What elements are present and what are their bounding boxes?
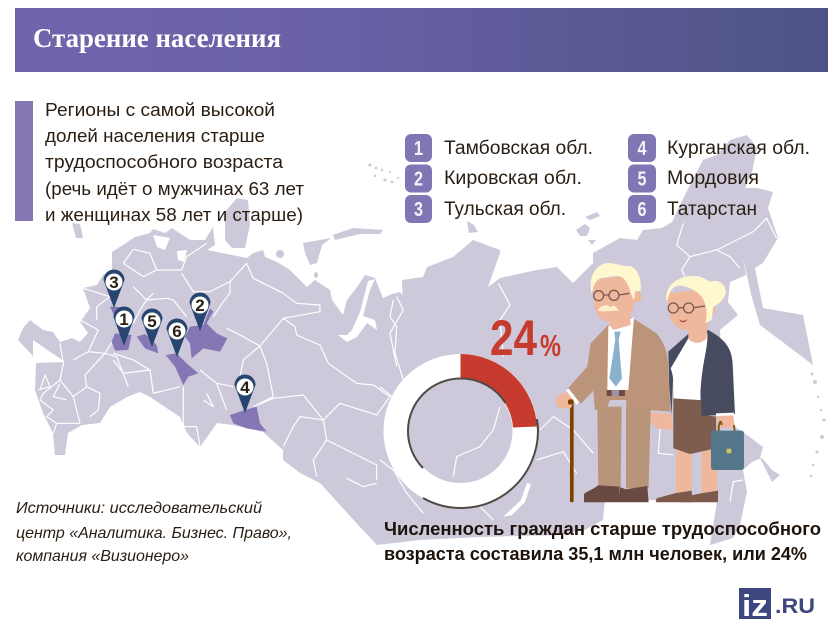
legend item 2: 2	[414, 168, 423, 190]
intro accent bar	[15, 101, 33, 221]
pin 3	[104, 270, 124, 308]
header band	[15, 8, 828, 72]
elderly woman	[656, 276, 744, 502]
sources: Источники: исследовательский	[16, 500, 262, 517]
legend item 1: Тамбовская обл.	[444, 138, 593, 159]
pin 4: 4	[240, 378, 250, 397]
pin 2	[190, 292, 210, 331]
legend item 5: 5	[638, 168, 646, 190]
logo iz.ru: iz	[742, 588, 768, 622]
title: Старение населения	[33, 23, 281, 53]
pin 4	[234, 374, 256, 413]
illustration: elderly couple	[556, 263, 744, 502]
intro text: долей населения старше	[45, 125, 265, 146]
24% value: 24	[490, 310, 537, 366]
sources	[16, 500, 292, 565]
sources: центр «Аналитика. Бизнес. Право»,	[16, 525, 292, 542]
legend item 6: Татарстан	[667, 199, 757, 220]
legend item 2	[405, 164, 582, 192]
logo iz.ru: .RU	[775, 595, 815, 618]
intro text: Регионы с самой высокой	[45, 99, 275, 120]
legend item 4: Курганская обл.	[667, 138, 810, 159]
caption with total: Численность граждан старше трудоспособного	[384, 519, 821, 539]
caption with total	[384, 519, 821, 564]
legend item 6: 6	[638, 199, 646, 221]
pin 5	[142, 308, 162, 347]
legend item 4: 4	[638, 138, 647, 160]
legend item 3: 3	[414, 199, 423, 221]
caption with total: возраста составила 35,1 млн человек, или 24%	[384, 544, 807, 564]
highlighted regions on the map	[110, 307, 267, 432]
legend item 4	[628, 134, 810, 162]
logo iz.ru	[739, 588, 815, 622]
intro text: и женщинах 58 лет и старше)	[45, 204, 303, 225]
legend item 5: Мордовия	[667, 168, 759, 189]
legend item 3	[405, 195, 566, 223]
pin 1: 1	[119, 310, 129, 329]
elderly man	[556, 263, 673, 502]
pin 2: 2	[195, 296, 205, 315]
legend item 3: Тульская обл.	[444, 199, 566, 220]
legend of regions	[405, 134, 810, 223]
legend item 2: Кировская обл.	[444, 168, 582, 189]
intro text: трудоспособного возраста	[45, 151, 284, 172]
donut chart 24%	[396, 354, 538, 508]
map of Russia	[18, 135, 826, 545]
legend item 5	[628, 164, 759, 192]
pin 3: 3	[109, 273, 119, 292]
legend item 1: 1	[414, 138, 423, 160]
24% value: %	[540, 328, 561, 363]
pin 6: 6	[172, 322, 182, 341]
pin 1	[114, 306, 134, 346]
legend item 1	[405, 134, 593, 162]
intro text	[45, 99, 305, 225]
sources: компания «Визионеро»	[16, 548, 189, 565]
pin 6	[166, 318, 188, 357]
intro text: (речь идёт о мужчинах 63 лет	[45, 178, 305, 199]
legend item 6	[628, 195, 757, 223]
pin 5: 5	[147, 312, 157, 331]
map pins	[104, 270, 256, 413]
